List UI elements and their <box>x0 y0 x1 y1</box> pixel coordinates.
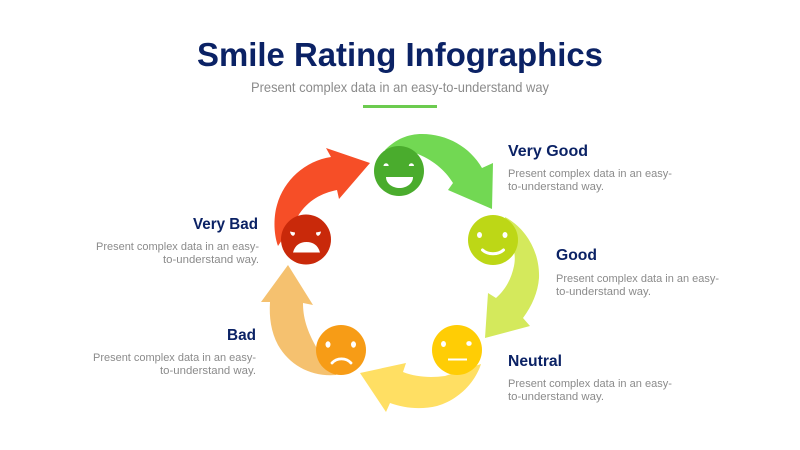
subtitle: Present complex data in an easy-to-understand way <box>251 79 549 95</box>
smiley: bad <box>316 325 366 375</box>
label: neutral <box>508 353 672 403</box>
title underline <box>363 105 437 108</box>
label: bad <box>93 327 256 377</box>
label: bad: to-understand way. <box>160 365 256 377</box>
label: very bad <box>96 216 259 266</box>
smiley: very bad <box>281 214 331 264</box>
label: very bad: Present complex data in an easy- <box>96 241 259 253</box>
label: good: Present complex data in an easy- <box>556 273 719 285</box>
arrow: bad <box>261 265 342 375</box>
label: very good: to-understand way. <box>508 181 604 193</box>
arrow: neutral <box>360 363 481 412</box>
arrow: very good <box>385 134 493 209</box>
label: good <box>556 247 719 298</box>
label: neutral: Present complex data in an easy- <box>508 378 672 390</box>
label: very good <box>508 143 672 193</box>
label: neutral: to-understand way. <box>508 391 604 403</box>
label: bad: Present complex data in an easy- <box>93 352 256 364</box>
smiley: good <box>468 215 518 265</box>
smiley: neutral <box>432 325 482 375</box>
label: very bad: Very Bad <box>193 216 258 233</box>
arrow: good <box>485 217 539 338</box>
arrow: very bad <box>274 148 370 246</box>
label: good: Good <box>556 247 597 264</box>
label: good: to-understand way. <box>556 286 651 298</box>
smiley: very good <box>374 146 424 196</box>
title: Smile Rating Infographics <box>197 37 603 74</box>
label: neutral: Neutral <box>508 353 562 370</box>
label: bad: Bad <box>227 327 256 344</box>
label: very bad: to-understand way. <box>163 254 259 266</box>
label: very good: Present complex data in an easy- <box>508 168 672 180</box>
label: very good: Very Good <box>508 143 588 160</box>
